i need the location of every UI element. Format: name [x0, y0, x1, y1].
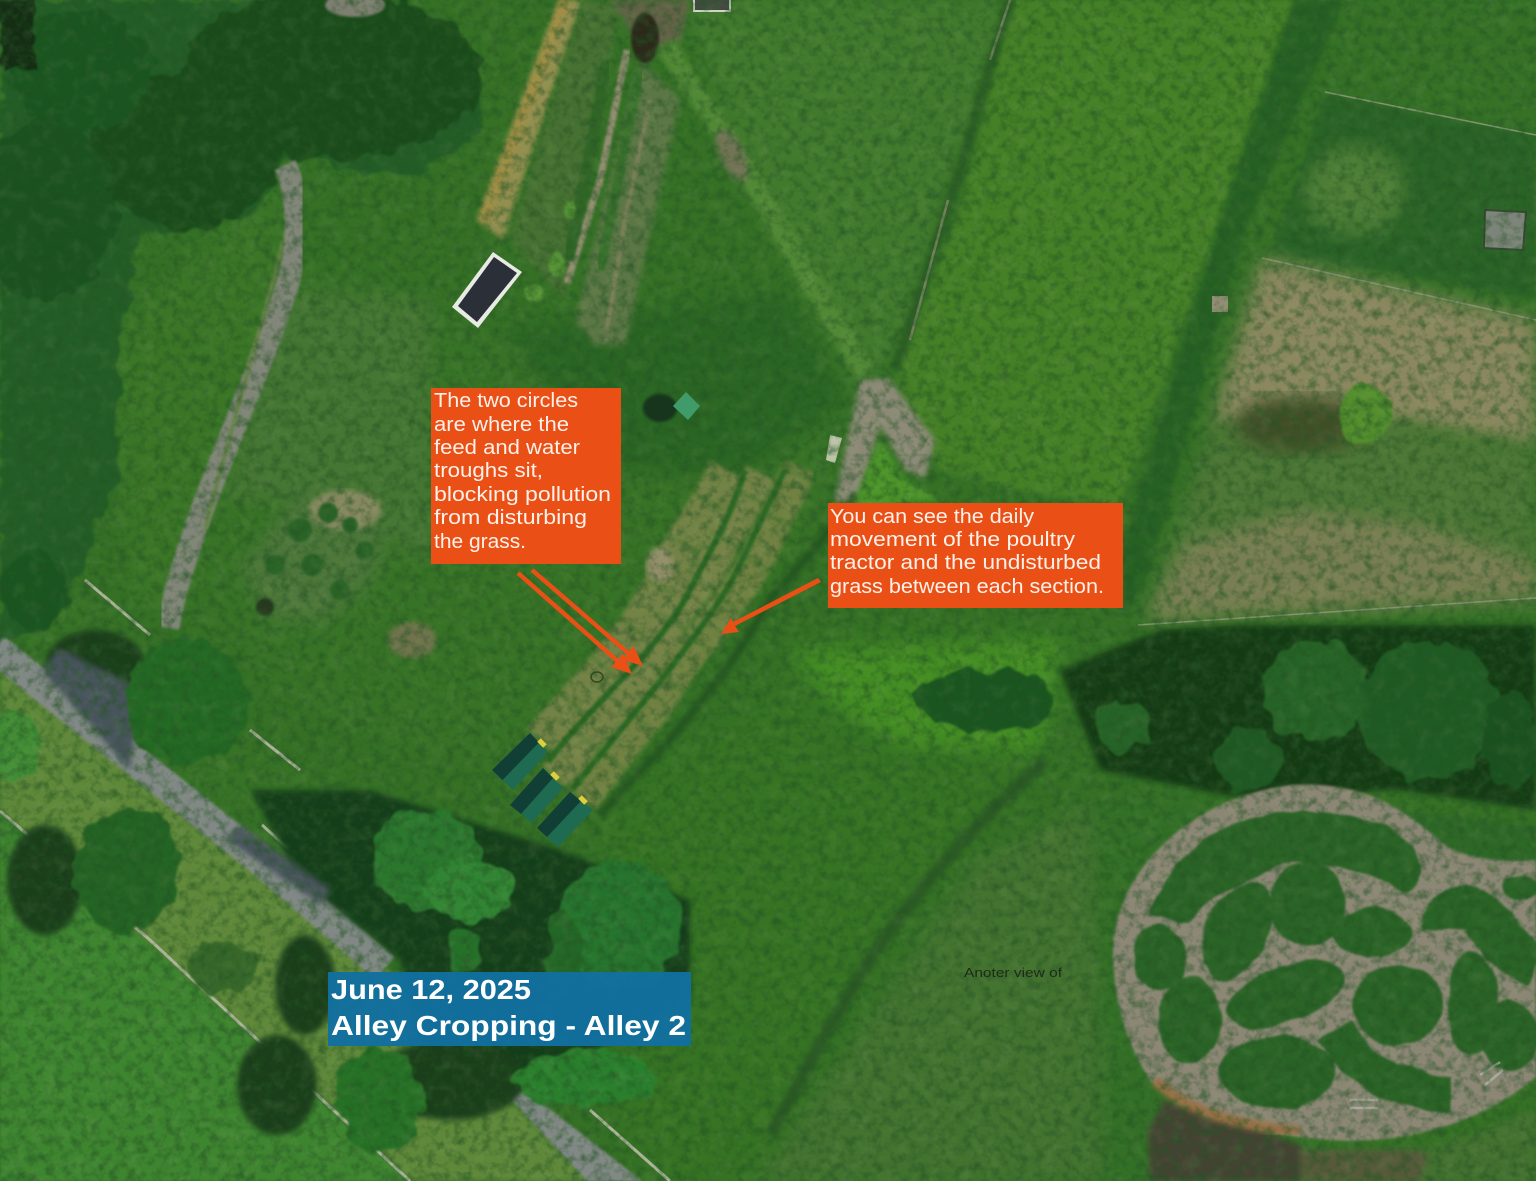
shed roof [1484, 210, 1526, 250]
dark hedge along strip [600, 495, 855, 815]
small bushes [524, 201, 576, 302]
white topped shed [694, 0, 730, 11]
callout: feed and water troughs: The two circles [434, 390, 578, 412]
left lawn and strips [0, 660, 590, 1181]
green shelter [643, 392, 700, 422]
rock pile [325, 0, 385, 17]
arrows to the two circles [516, 568, 643, 674]
callout: feed and water troughs: troughs sit, [434, 460, 543, 482]
fence line [1138, 92, 1536, 625]
top vegetable rows [478, 0, 690, 345]
callout: feed and water troughs: feed and water [434, 437, 580, 459]
central meadow tones [0, 0, 1200, 1181]
faint stray label: Anoter view of [964, 965, 1062, 980]
callout: feed and water troughs: from disturbing [434, 507, 587, 529]
right hay field [895, 0, 1292, 505]
gravel path ring [1113, 785, 1536, 1141]
upper right plots [1148, 0, 1536, 618]
fences [0, 580, 670, 1181]
callout: feed and water troughs: blocking pollution [434, 484, 611, 506]
callout: feed and water troughs [431, 388, 621, 564]
callout: poultry tractor movement: You can see the daily [830, 506, 1034, 528]
dirt crossing [826, 378, 940, 510]
tree shadows and trees [0, 630, 690, 1152]
arrow to tractor strips [721, 578, 821, 634]
callout: poultry tractor movement: tractor and the undisturbed [830, 552, 1101, 574]
callout: feed and water troughs: are where the [434, 414, 569, 436]
hedge strip right of field [1120, 0, 1345, 620]
callout: poultry tractor movement [828, 503, 1123, 608]
spiral herb garden [1113, 785, 1536, 1181]
tractor track [665, 45, 865, 375]
alley tractor strips [539, 467, 800, 801]
paved road [0, 648, 642, 1181]
right tree line [915, 625, 1536, 900]
forest top left [0, 0, 480, 640]
raised bed [452, 252, 522, 328]
orange clay edge [1155, 1080, 1300, 1132]
darker grass lanes between strips [548, 470, 745, 762]
cross strips [539, 470, 727, 742]
mulch circle garden [240, 490, 436, 658]
title banner [328, 972, 691, 1046]
dirt plots below ring [1148, 1100, 1536, 1181]
hedge line in lower meadow [770, 760, 1045, 1135]
planting beds [1133, 810, 1536, 1108]
callout: feed and water troughs: the grass. [434, 531, 526, 553]
poultry tractors [492, 733, 593, 847]
title banner: June 12, 2025 [331, 974, 531, 1005]
title banner: Alley Cropping - Alley 2 [331, 1010, 686, 1041]
hedge along field edge [895, 0, 1010, 370]
dark soil mound [631, 13, 659, 63]
curved access road [168, 165, 296, 628]
callout: poultry tractor movement: grass between each section. [830, 576, 1104, 598]
callout: poultry tractor movement: movement of the poultry [830, 529, 1075, 551]
gates [1350, 1062, 1503, 1108]
